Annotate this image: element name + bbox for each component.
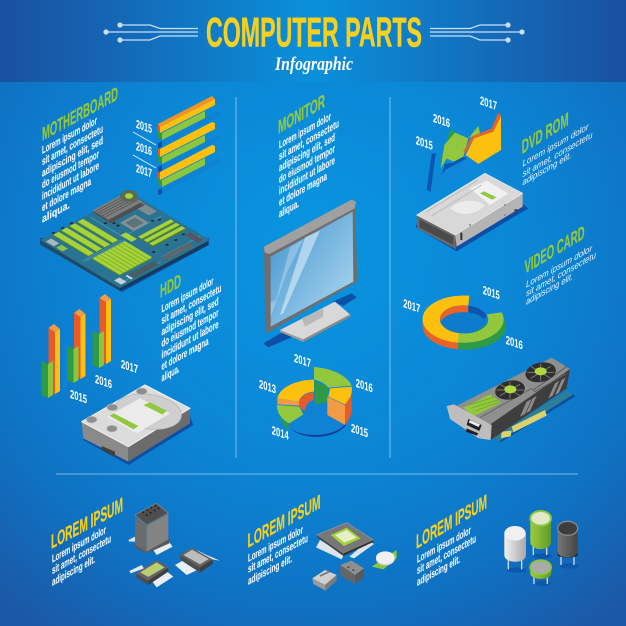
- icon: graphics card: [447, 358, 575, 442]
- chart: segmented ring: 2016: [356, 376, 373, 396]
- heading: motherboard: MOTHERBOARD: [42, 83, 118, 146]
- chart: area chart: 2015: [416, 133, 433, 153]
- icon: motherboard board: [38, 190, 210, 292]
- text block: motherboard: do eiusmod tempor: [42, 147, 99, 191]
- text block: lorem ipsum 3: adipiscing elit.: [417, 552, 460, 589]
- text block: dvd rom: adipiscing elit.: [522, 150, 571, 188]
- icon: capacitors: [504, 511, 579, 586]
- text block: motherboard: sit amet, consectetu: [42, 122, 103, 168]
- panel: bottom center chips: [248, 490, 397, 591]
- heading: lorem ipsum 2: LOREM IPSUM: [248, 490, 320, 553]
- chart: segmented ring: 2015: [351, 421, 368, 441]
- chart: segmented ring: 2013: [259, 377, 276, 397]
- chart: stacked bars: 2015: [136, 117, 152, 136]
- text block: motherboard: et dolore magna: [42, 174, 91, 214]
- text block: lorem ipsum 3: sit amet, consectetu: [417, 532, 476, 577]
- subtitle: Infographic: [274, 54, 353, 75]
- chart: segmented ring: 2014: [272, 423, 289, 443]
- text block: hdd: incididunt ut labore: [162, 317, 219, 361]
- icon: hard disk drive: [82, 385, 193, 465]
- chart: donut: 2016: [506, 333, 523, 353]
- text block: motherboard: Lorem ipsum dolor: [42, 113, 97, 157]
- icon: right circuit lines: [430, 22, 525, 43]
- text block: video card: Lorem ipsum dolor: [526, 243, 593, 290]
- chart: stacked bars: [133, 96, 220, 195]
- text block: lorem ipsum 3: [417, 523, 476, 589]
- icon: left circuit lines: [103, 22, 198, 43]
- dark heatsink: [95, 195, 145, 223]
- text block: hdd: adipiscing elit, sed: [162, 294, 218, 338]
- heading: dvd rom: DVD ROM: [522, 108, 569, 159]
- right slots: [138, 220, 186, 247]
- text block: monitor: sit amet, consectetu: [279, 116, 339, 163]
- icon: chips: [128, 503, 220, 587]
- text block: video card: sit amet, consectetu: [526, 250, 597, 299]
- chart: area chart: 2016: [433, 111, 450, 131]
- icon: monitor: [263, 199, 357, 347]
- chart: area chart: 2017: [480, 94, 497, 113]
- chart: segmented ring: [259, 351, 373, 443]
- text block: hdd: [162, 274, 222, 384]
- chart: 3d columns: 2015: [70, 387, 87, 407]
- chart: donut: [403, 283, 523, 353]
- cpu socket: [120, 215, 149, 231]
- panel: hdd: [42, 271, 222, 465]
- panel: motherboard: [38, 83, 220, 292]
- chart: 3d columns: 2017: [121, 357, 138, 377]
- text block: lorem ipsum 2: [248, 523, 308, 588]
- panel: bottom right capacitors: [416, 489, 579, 589]
- chart: 3d columns: [42, 294, 138, 407]
- text block: hdd: Lorem ipsum dolor: [162, 274, 214, 315]
- small green block: [120, 232, 137, 242]
- text block: motherboard: [42, 113, 103, 226]
- text block: motherboard: aliqua.: [42, 197, 70, 226]
- text block: monitor: Lorem ipsum dolor: [279, 109, 331, 151]
- panel: video card: [403, 221, 597, 442]
- chart: area chart: [416, 94, 501, 192]
- title: COMPUTER PARTS: [206, 8, 422, 56]
- green heatsink: [92, 242, 152, 276]
- panel: monitor: [259, 90, 373, 443]
- chart: 3d columns: 2016: [95, 372, 112, 392]
- ports: [128, 261, 159, 278]
- heading: hdd: HDD: [160, 271, 181, 303]
- text block: hdd: sit amet, consectetu: [162, 281, 221, 327]
- text block: monitor: aliqua.: [279, 196, 299, 220]
- text block: lorem ipsum 1: sit amet, consectetu: [52, 532, 111, 577]
- heading: lorem ipsum 1: LOREM IPSUM: [51, 493, 123, 554]
- chart: segmented ring: 2017: [294, 351, 311, 371]
- panel: dvd rom: [416, 94, 593, 251]
- text block: video card: adipiscing elit.: [526, 271, 573, 308]
- text block: monitor: adipiscing elit, sed: [279, 130, 335, 174]
- left slots: [53, 219, 119, 257]
- chart: donut: 2017: [403, 296, 420, 316]
- chart: stacked bars: 2017: [136, 161, 152, 181]
- panel: bottom left chips: [51, 493, 220, 589]
- heading: lorem ipsum 3: LOREM IPSUM: [416, 489, 487, 554]
- text block: hdd: aliqua.: [162, 362, 180, 384]
- text block: dvd rom: Lorem ipsum dolor: [522, 121, 589, 169]
- text block: lorem ipsum 2: sit amet, consectetu: [248, 532, 308, 576]
- text block: lorem ipsum 2: Lorem ipsum dolor: [248, 523, 303, 565]
- text block: lorem ipsum 2: adipiscing elit.: [248, 552, 292, 588]
- icon: dvd drive: [416, 173, 528, 251]
- text block: motherboard: incididunt ut labore: [42, 158, 99, 203]
- text block: dvd rom: sit amet, consectetu: [522, 130, 593, 180]
- text block: monitor: incididunt ut labore: [279, 153, 335, 197]
- text block: monitor: [279, 109, 339, 220]
- chart: stacked bars: 2016: [136, 139, 152, 159]
- chart: donut: 2015: [483, 283, 500, 303]
- text block: motherboard: adipiscing elit, sed: [42, 133, 103, 180]
- text block: hdd: do eiusmod tempor: [162, 305, 219, 350]
- text block: lorem ipsum 1: Lorem ipsum dolor: [52, 523, 106, 565]
- text block: lorem ipsum 1: [52, 523, 111, 589]
- text block: hdd: et dolore magna: [162, 334, 209, 373]
- text block: monitor: et dolore magna: [279, 169, 327, 209]
- icon: processor and components: [312, 523, 397, 591]
- text block: lorem ipsum 3: Lorem ipsum dolor: [417, 523, 471, 566]
- header band: [0, 0, 626, 82]
- text block: monitor: do eiusmod tempor: [279, 142, 335, 186]
- text block: lorem ipsum 1: adipiscing elit.: [52, 552, 95, 589]
- heading: monitor: MONITOR: [278, 90, 325, 139]
